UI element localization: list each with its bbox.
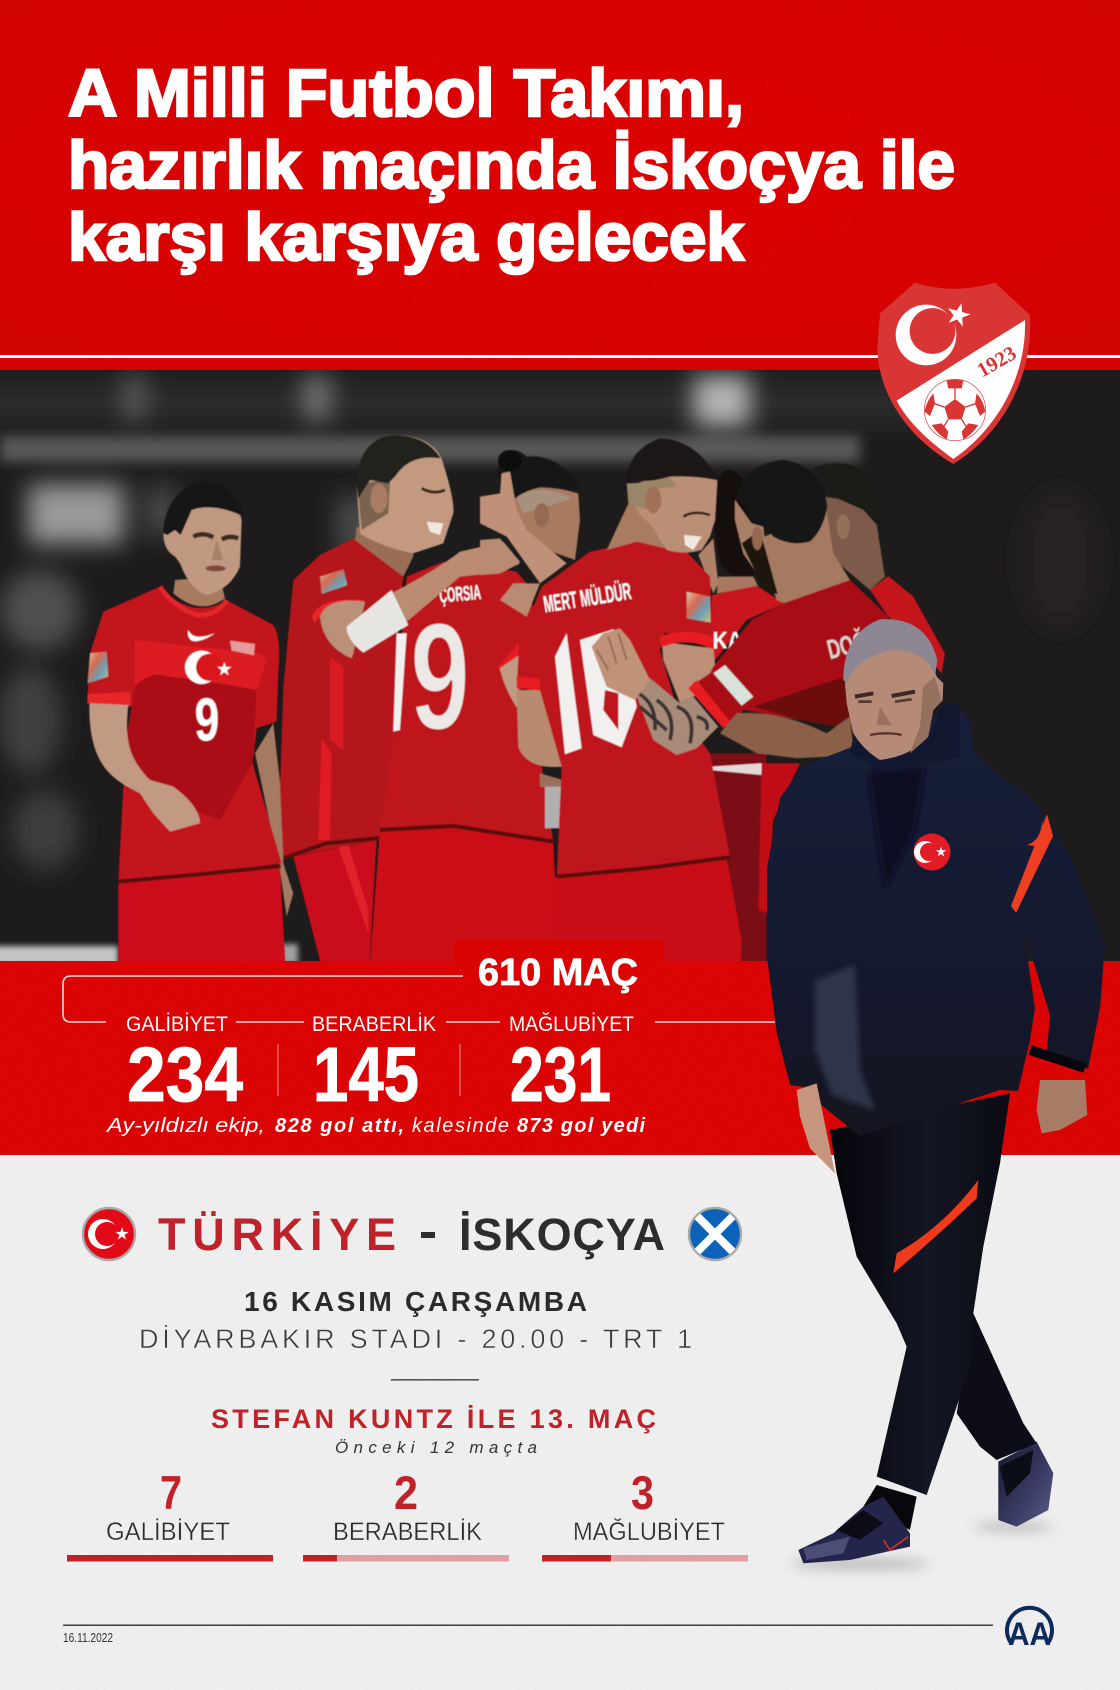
- player 1: number 9: [87, 482, 293, 987]
- match date: 16 KASIM ÇARŞAMBA: [244, 1286, 587, 1317]
- coach stat: wins: GALİBİYET: [106, 1517, 230, 1546]
- coach stat: losses: 3: [631, 1466, 654, 1519]
- photo: national team players celebrating: [0, 370, 1120, 987]
- coach stat: draws: BERABERLİK: [333, 1517, 482, 1546]
- stat: losses: 231: [510, 1032, 611, 1118]
- title: karşı karşıya gelecek: [68, 200, 745, 275]
- player 4: Mert Müldür: MERT MÜLDÜR: [542, 578, 633, 619]
- goals sentence: 873 gol yedi: [517, 1115, 645, 1137]
- red statistics band: [0, 940, 1120, 1155]
- coach heading: STEFAN KUNTZ İLE 13. MAÇ: [211, 1404, 656, 1434]
- player 2: body: [280, 435, 453, 987]
- player 1: number 9: 9: [195, 687, 219, 754]
- player 6: back right: [813, 463, 945, 673]
- jacket: [767, 710, 1105, 1136]
- match title: İSKOÇYA: [459, 1209, 665, 1260]
- coach stat: losses: MAĞLUBİYET: [573, 1517, 725, 1546]
- hands: [797, 1080, 1087, 1173]
- header background: [0, 0, 1120, 372]
- player 2: arm with white bandage: [320, 542, 520, 658]
- coach stat: losses: [542, 1466, 748, 1562]
- player 3: number 19: 9: [410, 591, 470, 762]
- icon: AA logo: AA: [1008, 1616, 1051, 1652]
- flag: Türkiye: [83, 1208, 135, 1260]
- player 5: Doğukan, arm with tattoo: [592, 460, 888, 913]
- player 4: Mert Müldür: [517, 438, 742, 987]
- title: hazırlık maçında İskoçya ile: [68, 128, 955, 203]
- goals sentence: Ay-yıldızlı ekip,: [106, 1115, 265, 1137]
- player 3: head and raised hand: [480, 450, 580, 828]
- coach subheading: Önceki 12 maçta: [335, 1438, 537, 1457]
- badge: [914, 834, 950, 870]
- goals sentence: [106, 1115, 645, 1137]
- match venue and time: DİYARBAKIR STADI - 20.00 - TRT 1: [139, 1323, 692, 1354]
- crest: Turkish Football Federation: 1923: [974, 342, 1020, 382]
- player 7: behind group: KA: [713, 627, 743, 654]
- match title: [158, 1209, 665, 1260]
- coach stat: draws: 2: [394, 1466, 418, 1519]
- crest: Turkish Football Federation: [877, 283, 1030, 464]
- footer rule: [63, 1624, 993, 1626]
- coach stat: wins: 7: [160, 1466, 182, 1519]
- match title: TÜRKİYE: [158, 1209, 396, 1260]
- player 5: Doğukan, arm with tattoo: DOĞ: [824, 625, 870, 665]
- footer date: 16.11.2022: [63, 1630, 113, 1645]
- crescent and star: [185, 651, 231, 684]
- jacket arm stripe: [1011, 814, 1053, 913]
- connector lines: [63, 976, 775, 1022]
- stat: draws: 145: [313, 1032, 419, 1118]
- title: A Milli Futbol Takımı,: [68, 56, 744, 131]
- blurred stadium background: [0, 370, 1120, 966]
- lower paper background: [0, 1155, 1120, 1690]
- coach stat: wins: [67, 1466, 273, 1562]
- head: [843, 619, 960, 773]
- stat: wins: GALİBİYET: [126, 1013, 228, 1036]
- flag: Scotland: [689, 1208, 741, 1260]
- coach stat: draws: [303, 1466, 509, 1562]
- player 3: number 19: [368, 562, 560, 987]
- coach: Stefan Kuntz: [767, 619, 1105, 1569]
- goals sentence: 828 gol attı,: [275, 1115, 404, 1137]
- trousers and shoes: [798, 1093, 1053, 1563]
- player 3: number 19: ÇORSIA: [438, 581, 482, 608]
- stat: draws: BERABERLİK: [312, 1013, 436, 1036]
- ball: [924, 379, 986, 441]
- goals sentence: kalesinde: [412, 1115, 509, 1137]
- shoe shadows: [790, 1523, 1053, 1569]
- heading: total matches: 610 MAÇ: [478, 952, 638, 994]
- stat: losses: MAĞLUBİYET: [509, 1013, 634, 1036]
- title: [68, 56, 955, 275]
- player 7: behind group: [698, 470, 784, 967]
- stat: wins: 234: [127, 1032, 243, 1118]
